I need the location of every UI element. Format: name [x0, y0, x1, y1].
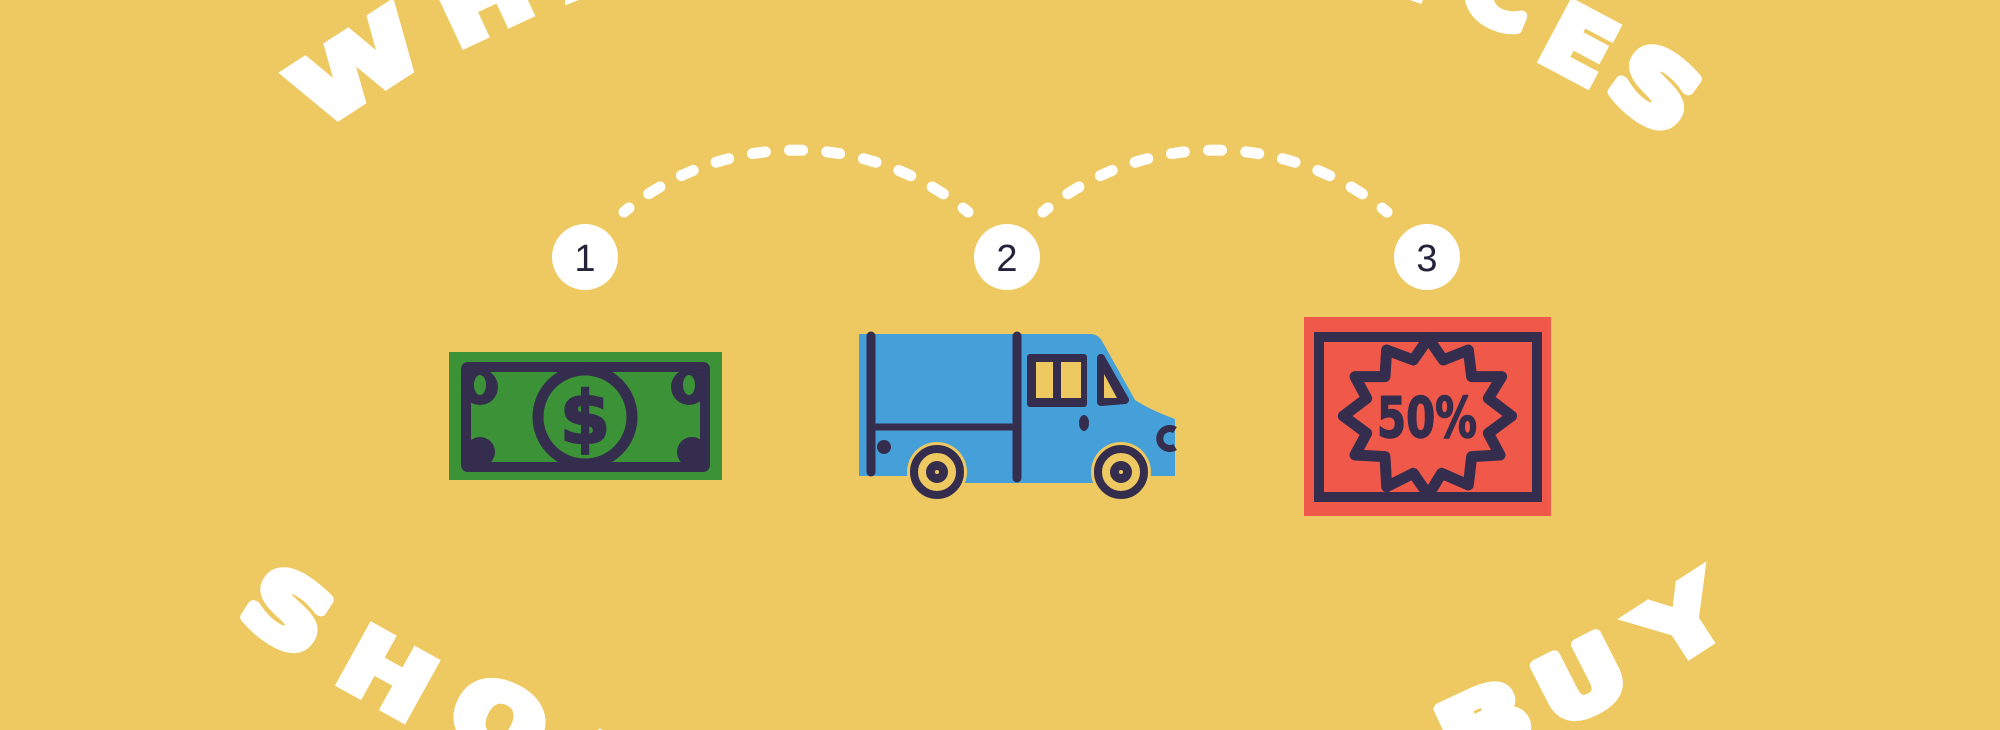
arrow: dashed arc from step 1 to step 2 — [624, 150, 968, 212]
icon: 50% discount tag — [1304, 317, 1551, 516]
step badge 3: 3 — [1416, 238, 1438, 280]
title: bottom arc: Y — [1617, 555, 1748, 691]
title: bottom arc: S — [226, 546, 349, 677]
truck wheel: rear — [907, 442, 967, 502]
icon: 50% discount tag: 50% — [1377, 386, 1477, 451]
step badge 2: 2 — [996, 238, 1018, 280]
icon: dollar bill — [449, 352, 722, 480]
title: bottom arc — [226, 546, 1748, 730]
truck windows — [1027, 354, 1125, 407]
step badge 1: 1 — [574, 238, 596, 280]
step badge 1 — [552, 224, 618, 290]
icon: delivery truck — [859, 334, 1175, 502]
title: top arc: S — [1592, 23, 1718, 155]
step badge 3 — [1394, 224, 1460, 290]
icon: dollar bill: $ — [560, 376, 610, 460]
truck wheel: front — [1091, 442, 1151, 502]
step badge 2 — [974, 224, 1040, 290]
arrow: dashed arc from step 2 to step 3 — [1043, 150, 1387, 212]
title: top arc — [273, 0, 1718, 155]
